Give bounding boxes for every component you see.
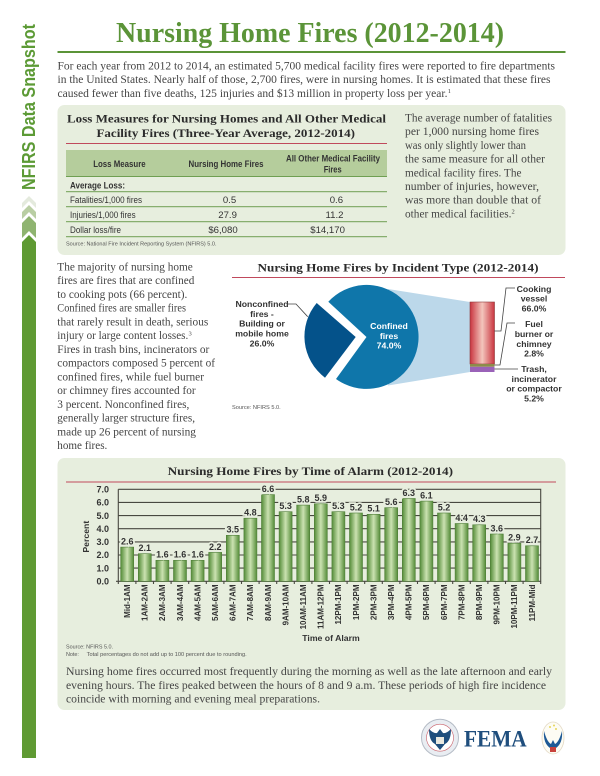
x axis labels: 11PM-Mid: [528, 584, 537, 621]
table: loss measures: [66, 150, 387, 237]
pie slice: confined fires: [328, 285, 419, 389]
x axis labels: 2AM-3AM: [158, 584, 167, 621]
label: trash: incinerator: [512, 374, 557, 384]
value labels: 5.1: [367, 504, 380, 514]
bars: [121, 495, 538, 581]
chart source and note: Note:: [66, 652, 79, 658]
pie source: Source: NFIRS 5.0.: [232, 405, 281, 411]
value labels: 1.6: [191, 550, 204, 560]
x axis labels: 2PM-3PM: [369, 584, 378, 620]
label: confined fires: [370, 321, 408, 350]
value labels: 2.2: [209, 542, 221, 552]
x axis labels: [123, 584, 537, 629]
y axis labels: 7.0: [96, 484, 109, 494]
y axis labels: 3.0: [96, 537, 109, 547]
side note text: 2: [512, 208, 515, 216]
table: loss measures: Fires: [324, 165, 342, 176]
label: trash: Trash,: [521, 364, 547, 374]
chart summary text: evening hours. The fires peaked between the hours of 8 and 9 a.m. These periods of high fire incidence: [66, 680, 546, 692]
sidebar label: NFIRS Data Snapshot: [19, 24, 39, 190]
y axis labels: [96, 484, 109, 586]
value labels: 2.9: [508, 533, 521, 543]
table: loss measures: 27.9: [218, 210, 237, 221]
left paragraph: incident types: made up 26 percent of nursing: [57, 426, 196, 438]
left paragraph: incident types: Confined fires are smaller fires: [57, 303, 186, 315]
x axis labels: 7AM-8AM: [246, 584, 255, 621]
logo: DHS seal: [422, 719, 458, 756]
side note text: was only slightly lower than: [405, 140, 526, 152]
x axis labels: Mid-1AM: [123, 584, 132, 618]
chart source and note: [66, 644, 247, 658]
label: fuel burner: 2.8%: [524, 349, 544, 359]
table: loss measures: Injuries/1,000 fires: [70, 210, 136, 221]
x axis labels: 1AM-2AM: [141, 584, 150, 621]
table: loss measures: Dollar loss/fire: [70, 225, 121, 236]
chart summary text: coincide with morning and evening meal preparations.: [66, 694, 320, 706]
side note text: other medical facilities.: [405, 208, 512, 220]
value labels: 3.6: [491, 523, 503, 533]
x axis labels: 3AM-4AM: [176, 584, 185, 621]
left paragraph: incident types: to cooking pots (66 percent).: [57, 289, 187, 301]
panel background: [58, 458, 566, 710]
value labels: 5.9: [315, 493, 327, 503]
x axis labels: 1PM-2PM: [352, 584, 361, 620]
left paragraph: incident types: confined fires, while fuel burner: [57, 371, 204, 383]
heading rule: [232, 277, 565, 278]
left paragraph: incident types: 3 percent. Nonconfined fires,: [57, 399, 189, 411]
side note text: was more than double that of: [405, 195, 541, 207]
left paragraph: incident types: fires are fires that are confined: [57, 275, 195, 287]
intro paragraph: For each year from 2012 to 2014, an estimated 5,700 medical facility fires were reported to fire departments: [58, 60, 556, 72]
x axis labels: 9PM-10PM: [493, 584, 502, 625]
label: cooking vessel: 66.0%: [522, 304, 547, 314]
left paragraph: incident types: generally larger structure fires,: [57, 413, 195, 425]
value labels: [121, 484, 538, 560]
left paragraph: incident types: [57, 262, 215, 452]
value labels: 4.3: [473, 514, 485, 524]
label: confined fires: Confined: [370, 321, 408, 331]
table: loss measures: $14,170: [310, 225, 345, 236]
chart source and note: Source: NFIRS 5.0.: [66, 644, 113, 650]
panel: loss measures: [58, 105, 566, 255]
chevrons and vertical bar: [22, 196, 36, 758]
logo: FEMA wordmark: FEMA: [464, 727, 527, 752]
label: confined fires: fires: [380, 331, 398, 341]
x axis labels: 5PM-6PM: [422, 584, 431, 620]
title: Nursing Home Fires (2012-2014): [116, 17, 504, 49]
chart heading: Nursing Home Fires by Time of Alarm (2012-2014): [168, 464, 453, 478]
label: cooking vessel: vessel: [521, 294, 547, 304]
value labels: 5.6: [385, 497, 397, 507]
table: loss measures: Loss Measure: [93, 159, 146, 170]
table: loss measures: Average Loss:: [70, 180, 125, 191]
table: loss measures: All Other Medical Facility: [286, 153, 381, 164]
label: fuel burner: [515, 319, 554, 359]
value labels: 4.4: [455, 513, 468, 523]
value labels: 4.8: [244, 508, 257, 518]
table: loss measures: 0.6: [330, 195, 343, 206]
label: fuel burner: chimney: [516, 339, 552, 349]
label: nonconfined fires: mobile home: [235, 328, 289, 338]
value labels: 6.3: [403, 488, 415, 498]
heading rule: [66, 482, 556, 483]
value labels: 5.3: [279, 501, 292, 511]
label: confined fires: 74.0%: [377, 340, 402, 350]
side note text: the same measure for all other: [405, 154, 545, 166]
label: nonconfined fires: [235, 299, 289, 348]
label: nonconfined fires: 26.0%: [250, 338, 275, 348]
y axis labels: 1.0: [96, 563, 109, 573]
label: nonconfined fires: Building or: [239, 319, 286, 329]
side note text: per 1,000 nursing home fires: [405, 126, 540, 138]
value labels: 1.6: [174, 550, 186, 560]
intro paragraph: 1: [448, 88, 451, 95]
side note text: The average number of fatalities: [405, 112, 553, 124]
label: trash: 5.2%: [524, 393, 544, 403]
intro paragraph: [58, 60, 556, 100]
left paragraph: incident types: 3: [188, 330, 192, 337]
left paragraph: incident types: home fires.: [57, 440, 107, 452]
panel: time of alarm: [58, 458, 566, 710]
table: loss measures: $6,080: [208, 225, 238, 236]
label: fuel burner: Fuel: [525, 319, 543, 329]
value labels: 2.7: [526, 535, 538, 545]
y axis labels: 4.0: [96, 524, 109, 534]
y axis labels: 2.0: [96, 550, 109, 560]
pie slice: nonconfined fires: [304, 303, 356, 378]
x axis labels: 4AM-5AM: [193, 584, 202, 621]
table heading: [67, 112, 387, 140]
x axis labels: 9AM-10AM: [281, 584, 290, 625]
label: trash: or compactor: [506, 384, 562, 394]
label: cooking vessel: Cooking: [517, 284, 551, 294]
chart summary text: Nursing home fires occurred most frequently during the morning as well as the late afternoon and early: [66, 666, 552, 678]
x axis labels: 5AM-6AM: [211, 584, 220, 621]
panel background: [58, 105, 566, 255]
x axis labels: 8AM-9AM: [264, 584, 273, 621]
side note text: [405, 112, 553, 220]
label: cooking vessel: [517, 284, 551, 314]
pie chart panel: incident type: [232, 260, 565, 411]
y axis labels: 0.0: [96, 576, 109, 586]
logo: USFA eagle: [542, 722, 564, 754]
x axis labels: 3PM-4PM: [387, 584, 396, 620]
x axis labels: 8PM-9PM: [475, 584, 484, 620]
value labels: 2.1: [139, 543, 151, 553]
x axis labels: 10PM-11PM: [510, 584, 519, 629]
bar chart: [81, 484, 541, 643]
stacked bar: confined breakdown: [470, 302, 494, 372]
x axis title: Time of Alarm: [302, 633, 360, 643]
x axis labels: 12PM-1PM: [334, 584, 343, 625]
x axis labels: 7PM-8PM: [457, 584, 466, 620]
value labels: 6.1: [420, 490, 433, 500]
intro paragraph: caused fewer than five deaths, 125 injuries and $13 million in property loss per year.: [58, 87, 448, 100]
intro paragraph: in the United States. Nearly half of those, 2,700 fires, were in nursing homes. It is estimated that these fires: [58, 74, 551, 86]
left paragraph: incident types: that rarely result in death, serious: [57, 316, 209, 328]
table source: Source: National Fire Incident Reporting System (NFIRS) 5.0.: [66, 242, 216, 248]
table: loss measures: 11.2: [326, 210, 343, 221]
value labels: 1.6: [156, 550, 169, 560]
left paragraph: incident types: or chimney fires accounted for: [57, 385, 196, 397]
table: loss measures: Nursing Home Fires: [188, 159, 264, 170]
x axis labels: 4PM-5PM: [405, 584, 414, 620]
left paragraph: incident types: The majority of nursing home: [57, 262, 193, 274]
left paragraph: incident types: Fires in trash bins, incinerators or: [57, 344, 209, 356]
value labels: 3.5: [227, 525, 239, 535]
heading rule: [66, 143, 387, 144]
side note text: number of injuries, however,: [405, 181, 539, 193]
y axis labels: 6.0: [96, 498, 109, 508]
table heading: Facility Fires (Three-Year Average, 2012-2014): [96, 126, 355, 140]
table heading: Loss Measures for Nursing Homes and All Other Medical: [67, 112, 387, 126]
x axis labels: 6AM-7AM: [229, 584, 238, 621]
chart source and note: Total percentages do not add up to 100 percent due to rounding.: [87, 652, 247, 658]
label: trash: [506, 364, 562, 403]
value labels: 2.6: [121, 536, 133, 546]
left paragraph: incident types: compactors composed 5 percent of: [57, 358, 215, 370]
table: loss measures: Fatalities/1,000 fires: [70, 195, 142, 206]
label: nonconfined fires: Nonconfined: [235, 299, 289, 309]
leader lines: [288, 288, 518, 369]
y axis title: Percent: [81, 521, 91, 553]
value labels: 5.2: [350, 502, 362, 512]
title rule: [58, 51, 566, 53]
x axis labels: 10AM-11AM: [299, 584, 308, 629]
label: nonconfined fires: fires -: [250, 309, 274, 319]
sidebar: NFIRS Data Snapshot: [19, 24, 39, 758]
left paragraph: incident types: injury or large content losses.: [57, 330, 188, 342]
value labels: 6.6: [262, 484, 274, 494]
zoom wedge: [388, 289, 470, 386]
value labels: 5.3: [332, 501, 345, 511]
chart summary text: [66, 666, 552, 706]
label: fuel burner: burner or: [515, 329, 554, 339]
x axis labels: 11AM-12PM: [317, 584, 326, 629]
x axis labels: 6PM-7PM: [440, 584, 449, 620]
pie heading: Nursing Home Fires by Incident Type (2012-2014): [258, 260, 538, 274]
table: loss measures: 0.5: [223, 195, 236, 206]
value labels: 5.8: [297, 494, 309, 504]
side note text: medical facility fires. The: [405, 167, 522, 179]
y axis labels: 5.0: [96, 511, 109, 521]
value labels: 5.2: [438, 502, 450, 512]
